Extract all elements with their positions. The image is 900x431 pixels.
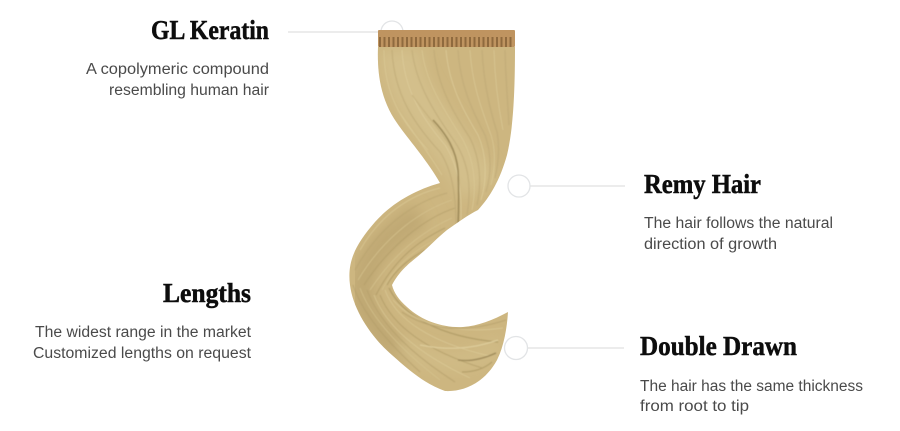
heading: Double Drawn: Double Drawn [640, 331, 797, 361]
heading: Remy Hair: Remy Hair [644, 169, 761, 199]
description: GL Keratin: resembling human hair [109, 82, 269, 99]
description: Remy Hair: direction of growth [644, 236, 777, 253]
callout marker: GL Keratin [288, 21, 403, 43]
hair body [349, 47, 515, 392]
heading: Lengths: Lengths [163, 278, 251, 308]
heading: GL Keratin: GL Keratin [151, 15, 269, 45]
description: Lengths [33, 324, 252, 362]
callout marker: Double Drawn [504, 336, 624, 360]
description: Double Drawn: from root to tip [640, 398, 749, 415]
description: Lengths: The widest range in the market [35, 324, 252, 341]
callout marker: Remy Hair [508, 175, 625, 197]
description: GL Keratin: A copolymeric compound [86, 61, 269, 78]
keratin top strip [378, 30, 515, 47]
description: Double Drawn: The hair has the same thickness [640, 378, 863, 395]
description: Remy Hair: The hair follows the natural [644, 215, 833, 232]
text block: Double Drawn [640, 331, 863, 415]
hair weft illustration [340, 30, 520, 400]
text block: Lengths [33, 278, 252, 362]
text block: Remy Hair [644, 169, 833, 253]
description: Remy Hair [644, 215, 833, 253]
description: Double Drawn [640, 378, 863, 415]
description: Lengths: Customized lengths on request [33, 345, 252, 362]
description: GL Keratin [86, 61, 269, 99]
text block: GL Keratin [86, 15, 269, 99]
